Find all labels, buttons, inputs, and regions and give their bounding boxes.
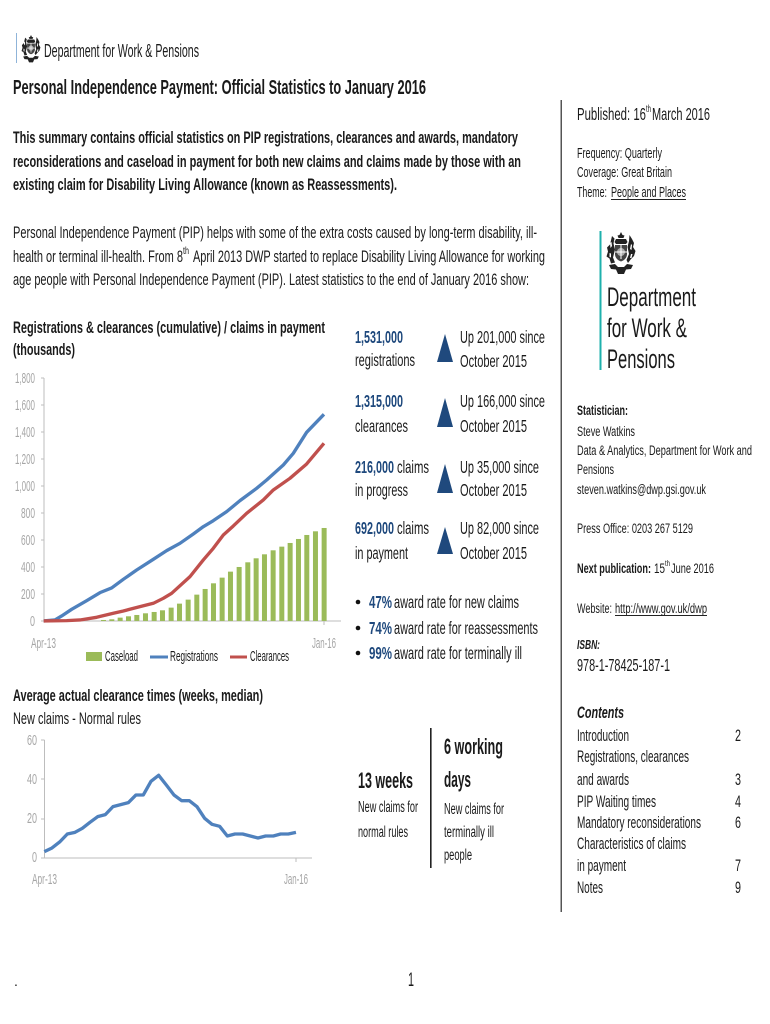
key figure: claims in progress: claims [397, 457, 429, 477]
header logo: Department for Work & Pensions: Department for Work & Pensions [44, 40, 199, 61]
key figure: claims in payment: in payment [355, 543, 408, 563]
x axis labels [32, 872, 308, 888]
footer: page number: . [14, 973, 18, 989]
contents list: 3 [735, 771, 741, 789]
website link [577, 601, 707, 616]
award rate bullets [356, 592, 538, 663]
contents list: 2 [735, 727, 741, 745]
y axis labels: 0 [32, 850, 37, 866]
x axis labels: Apr-13 [31, 636, 56, 652]
icon: up triangle [437, 527, 453, 554]
y axis labels: 1,000 [15, 479, 35, 495]
summary text block [13, 128, 521, 194]
contents list: 9 [735, 879, 741, 897]
y axis labels: 60 [27, 733, 37, 749]
award rate bullets: award rate for terminally ill [394, 643, 522, 663]
header logo: Department for Work & Pensions [16, 33, 199, 63]
stat: 6 working days: days [444, 767, 471, 792]
icon: royal crest [22, 35, 40, 62]
chart heading: clearance times [13, 686, 263, 728]
x axis labels: Jan-16 [284, 872, 308, 888]
award rate bullets: 99% [369, 643, 392, 663]
legend: Caseload [105, 649, 138, 665]
contents list: Contents [577, 704, 624, 722]
statistician contact details: steven.watkins@dwp.gsi.gov.uk [577, 482, 706, 497]
stat: 13 weeks: New claims for [358, 799, 418, 816]
legend [86, 649, 289, 665]
key figure: claims in progress [355, 457, 539, 500]
registrations line [44, 414, 324, 621]
footer: page number [14, 970, 414, 991]
y axis labels [15, 371, 35, 630]
publication details: th [646, 104, 651, 115]
publication details: March 2016 [652, 104, 710, 124]
chart heading: registrations and clearances [13, 318, 325, 359]
icon: royal crest [606, 232, 636, 274]
contents list [577, 704, 741, 897]
ISBN: ISBN: [577, 638, 600, 652]
statistician contact details: Steve Watkins [577, 424, 635, 439]
contents list: Characteristics of claims [577, 835, 686, 853]
y axis labels: 200 [21, 587, 35, 603]
statistician contact details: Pensions [577, 462, 614, 477]
publication details: Frequency: Quarterly [577, 146, 662, 162]
stat: 13 weeks: normal rules [358, 824, 408, 841]
next publication date: 15 [654, 561, 665, 576]
key figure: claims in progress: 216,000 [355, 457, 394, 477]
award rate bullets: 74% [369, 618, 392, 638]
key figure: clearances: 1,315,000 [355, 391, 403, 411]
key figure: clearances [355, 391, 545, 436]
key figure: registrations: October 2015 [460, 351, 527, 371]
key figure: clearances: Up 166,000 since [460, 391, 545, 411]
contents list: Introduction [577, 727, 629, 745]
key figure: claims in progress: in progress [355, 480, 408, 500]
stat: 6 working days: 6 working [444, 734, 503, 759]
next publication date: June 2016 [671, 561, 714, 576]
contents list: Registrations, clearances [577, 748, 689, 766]
stat: 6 working days: New claims for [444, 801, 504, 818]
key figure: claims in payment: 692,000 [355, 518, 394, 538]
summary text block: existing claim for Disability Living Allowance (known as Reassessments). [13, 175, 397, 194]
large logo: Department for Work & Pensions [600, 231, 696, 374]
icon: up triangle [437, 464, 453, 493]
publication details: People and Places [611, 185, 686, 201]
y axis labels: 1,800 [15, 371, 35, 387]
contents list: in payment [577, 857, 626, 875]
large logo: Department for Work & Pensions: Pensions [607, 344, 675, 374]
y axis labels: 0 [30, 614, 35, 630]
introduction text block: April 2013 DWP started to replace Disability Living Allowance for working [193, 247, 545, 266]
x axis labels [31, 636, 336, 652]
award rate bullets: 47% [369, 592, 392, 612]
x axis labels: Apr-13 [32, 872, 57, 888]
large logo: Department for Work & Pensions: for Work & [607, 313, 687, 343]
y axis labels: 400 [21, 560, 35, 576]
contents list: Notes [577, 879, 603, 897]
key figure: registrations [355, 327, 545, 371]
award rate bullets: award rate for new claims [394, 592, 519, 612]
contents list: 4 [735, 793, 741, 811]
contents list: and awards [577, 771, 629, 789]
key figure: claims in progress: Up 35,000 since [460, 457, 539, 477]
caseload bars [101, 528, 327, 621]
publication details [577, 104, 710, 201]
key figure: clearances: October 2015 [460, 416, 527, 436]
y axis labels: 800 [21, 506, 35, 522]
chart heading: registrations and clearances: (thousands) [13, 340, 75, 359]
key figure: registrations: 1,531,000 [355, 327, 403, 347]
legend: Clearances [250, 649, 289, 665]
key figure: registrations: Up 201,000 since [460, 327, 545, 347]
y axis labels: 1,200 [15, 452, 35, 468]
website link: http://www.gov.uk/dwp [615, 601, 707, 616]
median weeks line [44, 775, 296, 852]
stat: 6 working days [444, 734, 504, 864]
ISBN: 978-1-78425-187-1 [577, 655, 670, 675]
publication details: Coverage: Great Britain [577, 165, 672, 181]
icon: up triangle [437, 398, 453, 427]
y axis labels [27, 733, 37, 866]
chart heading: clearance times: New claims - Normal rules [13, 709, 141, 728]
stat: 13 weeks [358, 768, 418, 841]
award rate bullets: award rate for reassessments [394, 618, 538, 638]
y axis labels: 1,600 [15, 398, 35, 414]
clearances line [44, 443, 324, 621]
ISBN [577, 638, 670, 675]
icon: up triangle [437, 334, 453, 362]
contents list: PIP Waiting times [577, 793, 656, 811]
next publication date: th [665, 559, 670, 568]
key figure: claims in progress: October 2015 [460, 480, 527, 500]
y axis labels: 600 [21, 533, 35, 549]
footer: page number: 1 [408, 970, 414, 991]
title: Personal Independence Payment: Official Statistics to January 2016 [13, 77, 426, 99]
x axis labels: Jan-16 [312, 636, 336, 652]
stat: 13 weeks: 13 weeks [358, 768, 413, 793]
key figure: claims in payment: claims [397, 518, 429, 538]
key figure: claims in payment [355, 518, 539, 563]
line chart: clearance times [27, 733, 312, 888]
y axis labels: 20 [27, 811, 37, 827]
key figure: registrations: registrations [355, 350, 415, 370]
large logo: Department for Work & Pensions: Department [607, 282, 696, 312]
key figure: claims in payment: October 2015 [460, 543, 527, 563]
contents list: 7 [735, 857, 741, 875]
stat: 6 working days: terminally ill [444, 824, 494, 841]
chart heading: clearance times: Average actual clearance times (weeks, median) [13, 686, 263, 705]
y axis labels: 40 [27, 772, 37, 788]
combo chart: caseload bars, registrations and clearances lines [15, 371, 341, 665]
legend: Registrations [170, 649, 218, 665]
statistician contact details: Press Office: 0203 267 5129 [577, 521, 693, 536]
introduction text block [13, 223, 545, 289]
chart heading: registrations and clearances: Registrations & clearances (cumulative) / claims in payment [13, 318, 325, 337]
next publication date: Next publication: [577, 561, 651, 576]
introduction text block: th [183, 246, 189, 257]
introduction text block: health or terminal ill-health. From 8 [13, 247, 183, 266]
statistician contact details [577, 403, 752, 536]
key figure: claims in payment: Up 82,000 since [460, 518, 539, 538]
website link: Website: [577, 601, 612, 616]
y axis labels: 1,400 [15, 425, 35, 441]
publication details: Theme: [577, 185, 607, 201]
key figure: clearances: clearances [355, 416, 408, 436]
publication details: Published: 16 [577, 104, 646, 124]
statistician contact details: Statistician: [577, 403, 628, 418]
stat: 6 working days: people [444, 847, 472, 864]
contents list: 6 [735, 814, 741, 832]
